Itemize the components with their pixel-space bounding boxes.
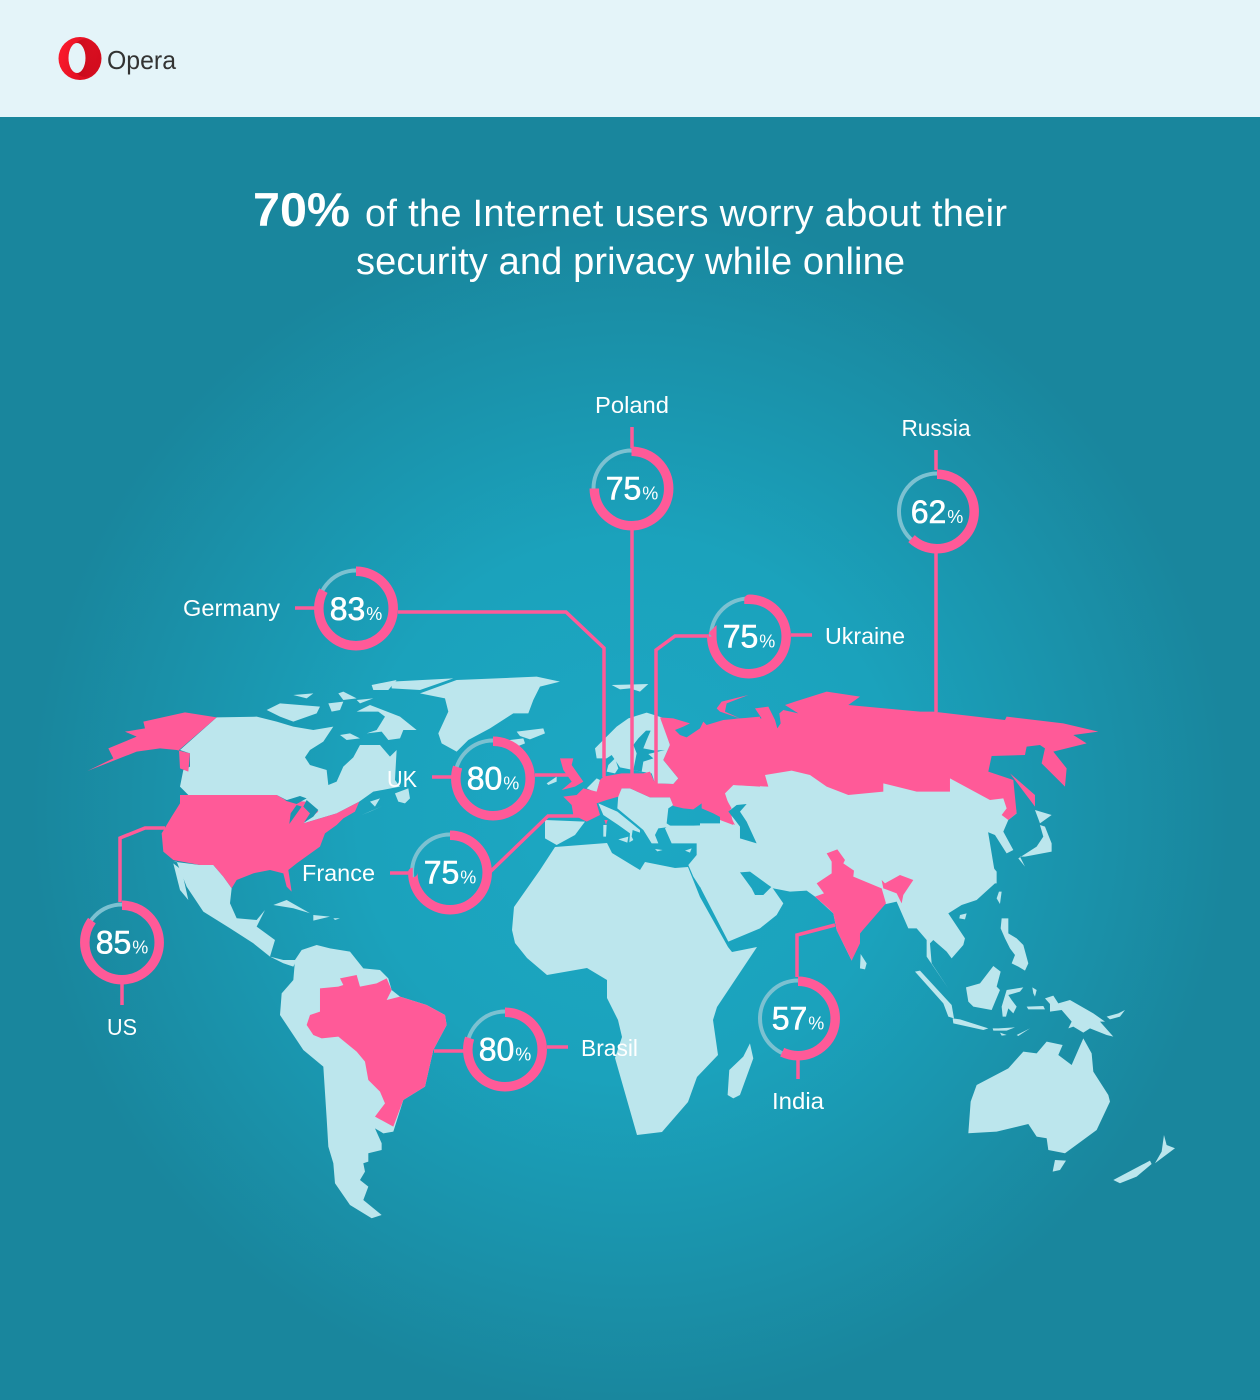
callout: Brasil (434, 1012, 638, 1088)
europe and middle east land (497, 684, 780, 887)
callout: India (760, 925, 836, 1114)
arctic islands and greenland (267, 677, 560, 752)
header band (0, 0, 1260, 117)
label: Russia (902, 415, 971, 441)
highlighted: United States (87, 712, 359, 892)
leader (434, 1047, 568, 1051)
ring chart 85% (84, 904, 160, 980)
ring chart 83% (318, 570, 394, 646)
leader (432, 775, 570, 777)
callout: UK (387, 740, 570, 816)
wordmark: Opera (107, 45, 177, 75)
ring chart 57% (760, 980, 836, 1056)
title line 2: security and privacy while online (356, 241, 905, 283)
southeast asia and oceania (915, 918, 1175, 1183)
ring chart 83%: 83% (330, 591, 382, 627)
callout: US (84, 828, 165, 1040)
north america (173, 717, 410, 967)
ring chart 75% (594, 450, 670, 526)
title (253, 183, 1007, 283)
icon: Opera O (58, 37, 102, 80)
label: Brasil (581, 1035, 638, 1061)
water: great lakes (285, 796, 318, 824)
ring chart 75% (711, 598, 787, 674)
title line 1: 70% (253, 183, 350, 236)
world map (87, 677, 1175, 1218)
callout: France (302, 816, 590, 910)
highlighted: east Russia (720, 692, 1098, 825)
callout: Germany (183, 570, 604, 777)
callout: Russia (899, 415, 975, 712)
asia south (700, 823, 1002, 988)
south america and madagascar (280, 945, 753, 1218)
ring chart 57%: 57% (772, 1000, 824, 1036)
water: baltic and caspian seas (633, 731, 757, 843)
label: Germany (183, 595, 281, 621)
ring chart 80% (467, 1012, 543, 1088)
highlighted: Brazil (307, 975, 447, 1127)
callout: Ukraine (656, 598, 905, 785)
logo: Opera (58, 37, 177, 80)
highlighted: UK, France, Germany, Poland, Ukraine, west Russia (560, 695, 760, 825)
ring chart 62%: 62% (911, 494, 963, 530)
leader (656, 635, 812, 785)
label: UK (387, 766, 418, 792)
leader (934, 450, 938, 712)
label: Ukraine (825, 623, 905, 649)
leader (295, 608, 604, 777)
leader (120, 828, 165, 1005)
ring chart 80% (455, 740, 531, 816)
highlighted: India (815, 849, 913, 961)
label: India (772, 1088, 824, 1114)
ring chart 80%: 80% (467, 760, 519, 796)
label: Poland (595, 392, 669, 418)
ring chart 62% (899, 474, 975, 550)
ring chart 85%: 85% (96, 924, 148, 960)
leader (797, 925, 835, 1079)
ring chart 75% (412, 834, 488, 910)
title line 1: of the Internet users worry about their (365, 193, 1007, 235)
callout: Poland (594, 392, 670, 777)
leader (630, 427, 634, 777)
asia north (720, 763, 1052, 883)
ring chart 80%: 80% (479, 1032, 531, 1068)
ring chart 75%: 75% (424, 854, 476, 890)
label: US (107, 1014, 137, 1040)
label: France (302, 860, 375, 886)
ring chart 75%: 75% (606, 470, 658, 506)
ring chart 75%: 75% (723, 618, 775, 654)
leader (390, 816, 590, 873)
africa (512, 843, 757, 1135)
